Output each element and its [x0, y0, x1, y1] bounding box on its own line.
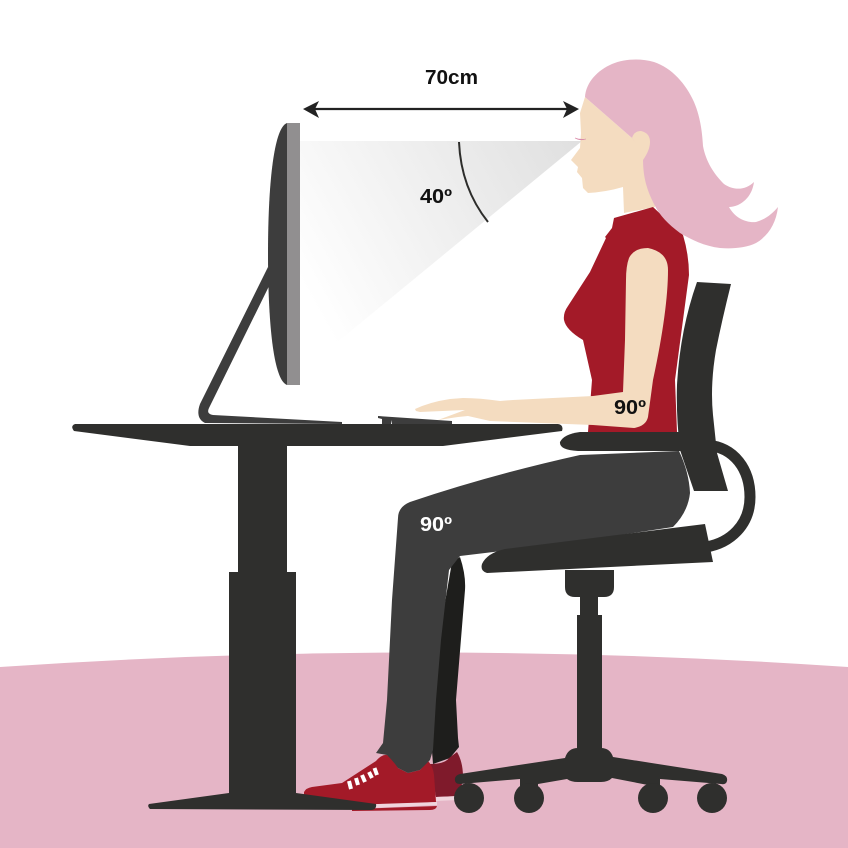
front trouser leg and thigh: [376, 451, 690, 773]
seat: [482, 524, 713, 573]
chair wheels: [454, 783, 484, 813]
hair: [585, 60, 778, 248]
desk: [72, 424, 562, 796]
back leg: [428, 557, 465, 764]
shoe laces: [349, 768, 377, 789]
monitor back: [268, 123, 287, 385]
floor: [0, 652, 848, 848]
70cm distance label: 70cm: [425, 67, 478, 89]
front shoe: [304, 755, 437, 811]
desk upper leg: [238, 445, 287, 573]
desk top: [72, 424, 562, 446]
monitor stand: [198, 267, 342, 424]
40 degree viewing angle arc: [459, 142, 488, 222]
arm: [415, 248, 668, 428]
chair back support ring: [706, 445, 750, 547]
90 degree knee label: 90º: [420, 514, 452, 536]
shoe sole: [346, 802, 437, 809]
chair: [454, 282, 750, 813]
shirt: [564, 207, 689, 432]
eyelash: [575, 138, 586, 140]
seat post: [580, 596, 598, 616]
armrest: [560, 432, 700, 451]
distance arrow: [303, 101, 579, 118]
monitor screen edge: [287, 123, 300, 385]
viewing cone: [300, 141, 582, 358]
chair base: [455, 748, 727, 790]
keyboard: [378, 416, 452, 424]
back shoe: [430, 752, 463, 801]
neck and face: [571, 97, 660, 213]
monitor: [198, 123, 342, 424]
desk lower leg: [229, 572, 296, 796]
seat post block: [565, 570, 614, 597]
backrest: [677, 282, 731, 491]
desk foot: [148, 793, 376, 810]
ear: [632, 131, 650, 160]
40 degree label: 40º: [420, 186, 452, 208]
90 degree elbow label: 90º: [614, 397, 646, 419]
